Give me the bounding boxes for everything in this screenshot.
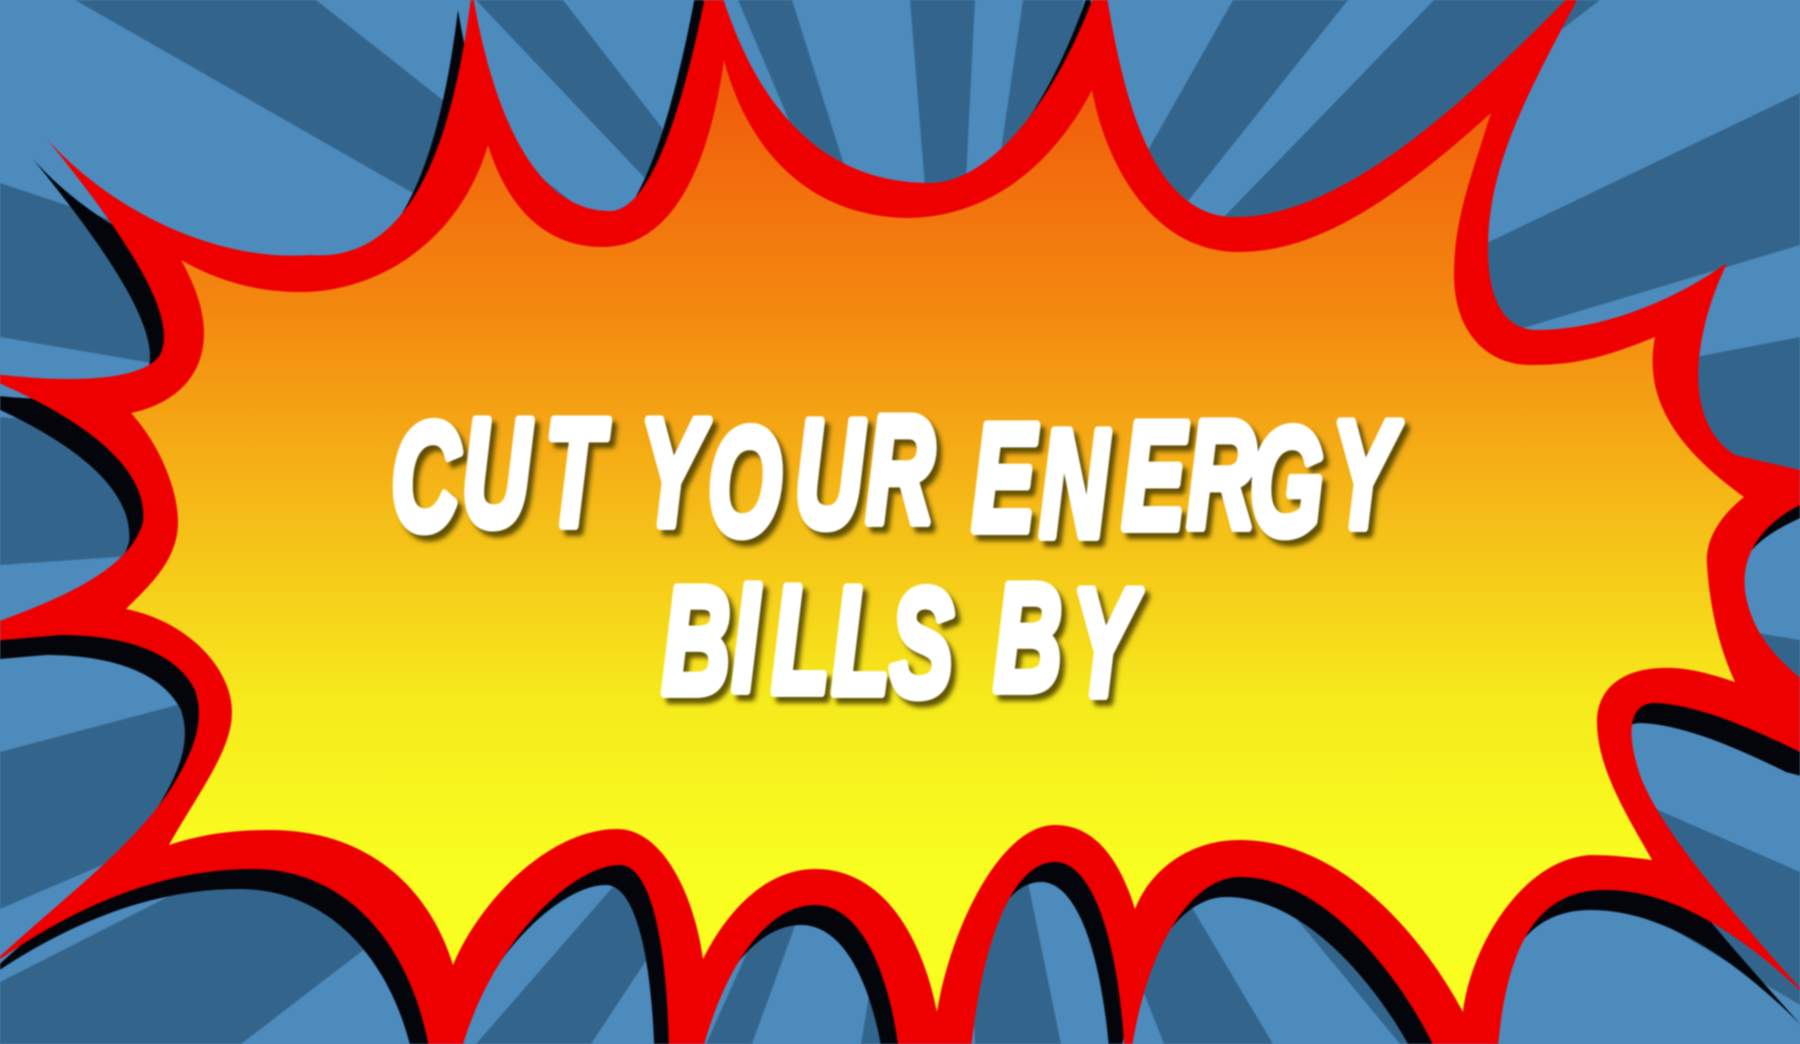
headline text (391, 385, 1402, 727)
headline line 2: BILLS BY (662, 553, 1142, 727)
headline line 1: CUT YOUR ENERGY (391, 385, 1402, 568)
